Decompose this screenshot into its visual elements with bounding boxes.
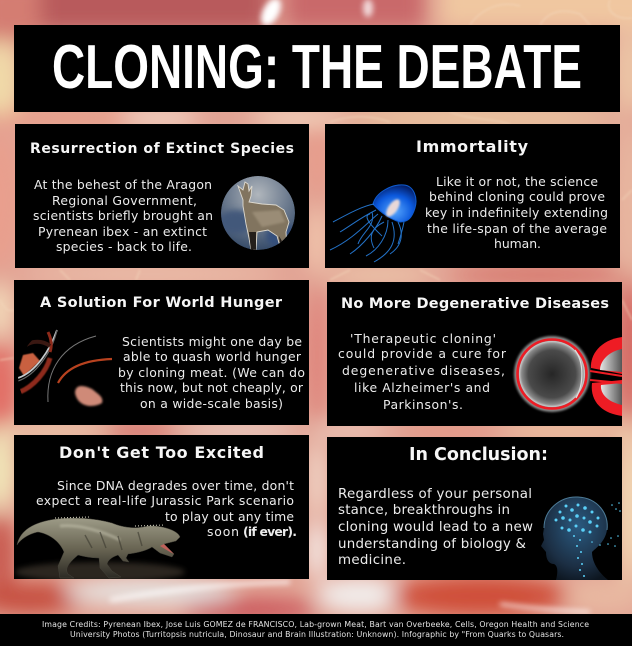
body text: Like it or not, the science	[436, 174, 598, 189]
body text: understanding of biology &	[338, 537, 527, 552]
heading: Don't Get Too Excited	[59, 443, 264, 462]
panel: no more degenerative diseases	[327, 282, 622, 426]
panel: resurrection of extinct species	[15, 124, 309, 268]
body text: on a wide-scale basis)	[140, 396, 283, 411]
body text	[425, 174, 608, 251]
body text: scientists briefly brought an	[33, 208, 213, 223]
body text: human.	[494, 236, 541, 251]
body text: medicine.	[338, 553, 406, 568]
body text: the life-span of the average	[427, 221, 607, 236]
body text: (if ever).	[243, 524, 297, 539]
body text: degenerative diseases,	[342, 363, 505, 378]
footer: image credits: University Photos (Turritopsis nutricula, Dinosaur and Brain Illustration: Unknown). Infographic by "From Quarks to Quasars.	[70, 630, 564, 639]
body text: could provide a cure for	[338, 346, 507, 361]
heading: Resurrection of Extinct Species	[30, 141, 294, 157]
body text	[338, 487, 533, 568]
heading: In Conclusion:	[409, 445, 548, 465]
body text: species - back to life.	[56, 239, 192, 254]
panel: don't get too excited	[14, 435, 309, 582]
body text: Regional Government,	[52, 193, 197, 208]
dust cloud	[15, 562, 185, 582]
body text: cloning would lead to a new	[338, 520, 533, 535]
icon: lab-grown meat	[18, 330, 112, 406]
body text: by cloning meat. (We can do	[118, 365, 305, 380]
body text: like Alzheimer's and	[354, 380, 490, 395]
body text: expect a real-life Jurassic Park scenario	[36, 493, 294, 508]
body text: Scientists might one day be	[122, 334, 302, 349]
icon: brain illustration	[541, 497, 621, 580]
body text: soon	[207, 524, 239, 539]
footer: image credits	[0, 614, 632, 646]
body text	[338, 331, 507, 412]
body text: this now, but not cheaply, or	[120, 380, 304, 395]
body text: Regardless of your personal	[338, 487, 532, 502]
body text: Parkinson's.	[383, 397, 463, 412]
footer: image credits: Image Credits: Pyrenean Ibex, Jose Luis GOMEZ de FRANCISCO, Lab-grown Meat, Bart van Overbeeke, Cells, Oregon Health and Science	[42, 620, 589, 629]
heading: A Solution For World Hunger	[40, 295, 283, 311]
panel: a solution for world hunger	[14, 280, 309, 425]
body text: able to quash world hunger	[123, 349, 302, 364]
body text	[33, 177, 213, 254]
icon: jellyfish	[330, 185, 416, 262]
body text: to play out any time	[165, 509, 294, 524]
icon: dinosaur	[17, 517, 180, 578]
body text	[118, 334, 305, 411]
body text: Pyrenean ibex - an extinct	[38, 224, 207, 239]
icon: cells	[514, 336, 622, 416]
heading: No More Degenerative Diseases	[341, 296, 609, 312]
panel: immortality	[325, 124, 620, 268]
heading: Immortality	[416, 137, 529, 156]
body text: Since DNA degrades over time, don't	[57, 478, 294, 493]
body text: key in indefinitely extending	[425, 205, 608, 220]
panel: in conclusion	[327, 437, 622, 580]
body text: 'Therapeutic cloning'	[350, 331, 496, 346]
body text: At the behest of the Aragon	[34, 177, 212, 192]
body text: stance, breakthroughs in	[338, 503, 510, 518]
body text	[36, 478, 297, 539]
body text: behind cloning could prove	[429, 189, 605, 204]
title banner	[14, 25, 620, 112]
icon: ibex photo	[218, 176, 298, 251]
